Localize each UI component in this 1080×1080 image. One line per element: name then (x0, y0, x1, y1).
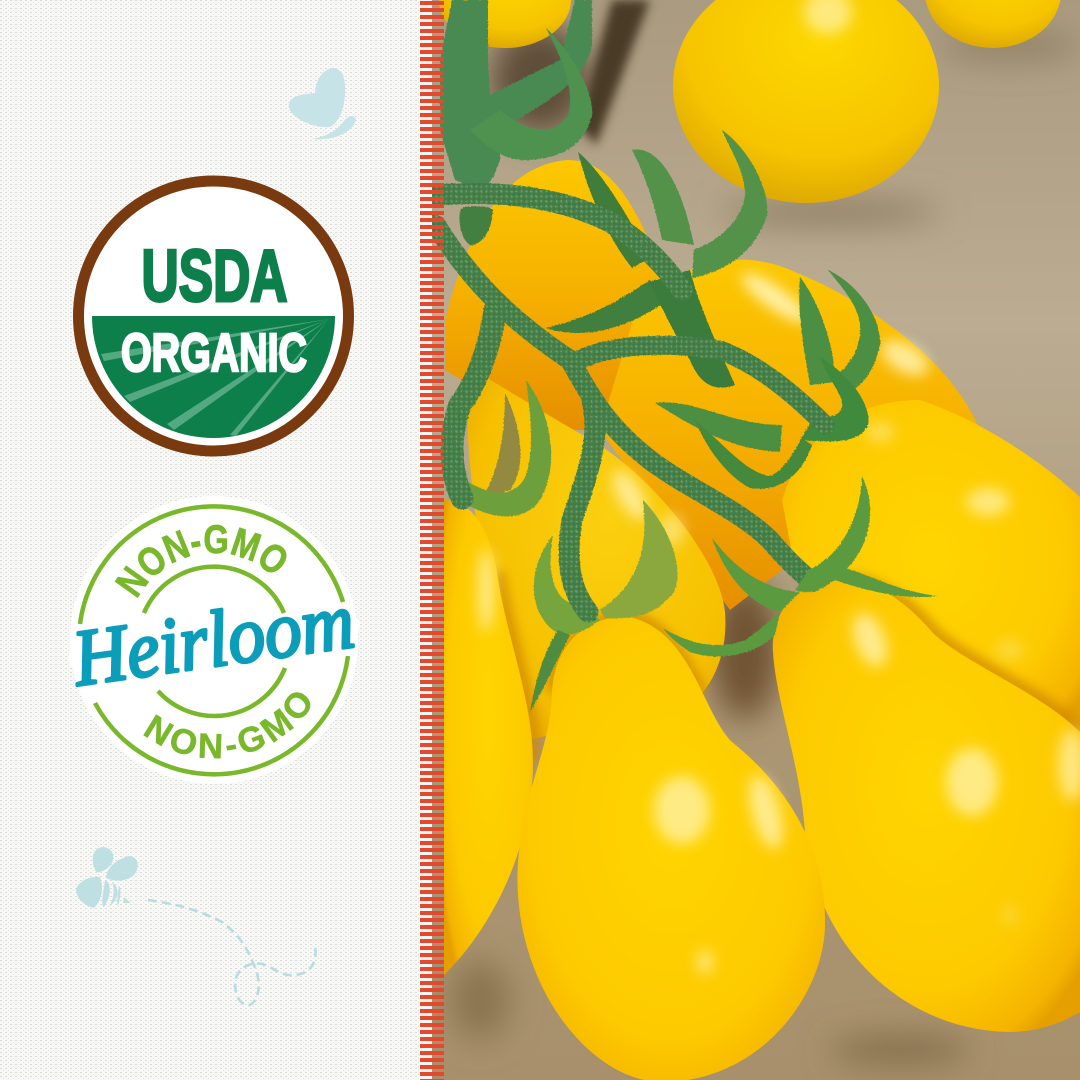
tomato: big right pear (773, 580, 1080, 1032)
green field half circle (92, 316, 335, 438)
tomato: right middle (782, 400, 1080, 745)
right lower calyx leaves (663, 476, 938, 657)
tomato: centre pear (517, 617, 825, 1080)
icon: bee with dashed flight path (76, 847, 316, 1005)
contact shadows between tomatoes (497, 572, 1080, 762)
panel: white linen background (0, 0, 420, 1080)
text: Heirloom script: Heirloom (67, 577, 359, 703)
top calyx (440, 0, 592, 245)
icon: butterfly (289, 68, 356, 139)
heading: ORGANIC: ORGANIC (121, 323, 307, 383)
right calyx leaves (655, 270, 880, 489)
tomato: upper back right (600, 260, 978, 610)
heading: USDA: USDA (142, 236, 288, 317)
left calyx leaves (486, 393, 521, 493)
text: NON-GMO top: NON-GMO (114, 524, 286, 598)
icon: Non-GMO Heirloom seal (67, 496, 359, 783)
text: NON-GMO bottom: NON-GMO (143, 692, 310, 758)
tomato: top right (925, 0, 1061, 48)
icon: USDA Organic seal (78, 181, 348, 451)
tomato highlights (478, 0, 1080, 974)
panel: yellow pear tomato photo (432, 0, 1080, 1080)
outer ring arcs (80, 506, 348, 774)
lower calyx leaves (530, 500, 678, 712)
tomato: upper back left (445, 160, 680, 430)
stems (436, 193, 825, 612)
wooden surface (432, 0, 1080, 1080)
upper calyx leaves (545, 130, 767, 388)
field rays (101, 319, 329, 436)
tomato: top left small (439, 0, 571, 48)
divider: red stitched stripe (420, 0, 444, 1080)
vine stems and calyx leaves (436, 0, 938, 712)
tomato: left pear (444, 500, 533, 975)
tomato: top centre (673, 0, 939, 203)
tomato: middle back (467, 368, 725, 740)
